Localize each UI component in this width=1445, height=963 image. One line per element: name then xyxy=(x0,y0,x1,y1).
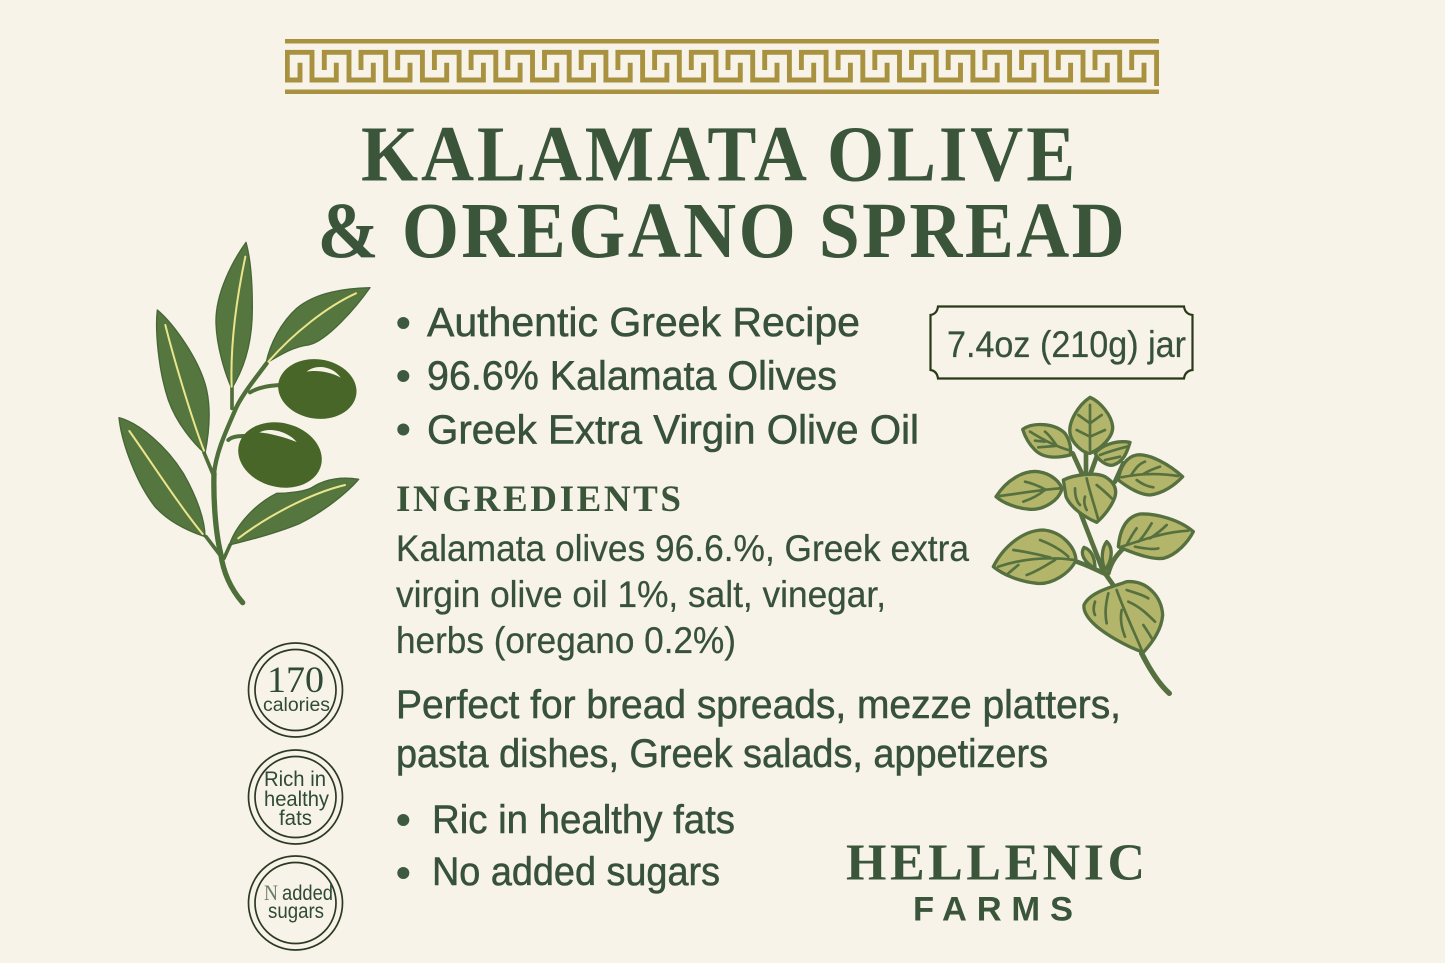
feature bullet list xyxy=(397,299,919,452)
badge: no added sugars: sugars xyxy=(268,900,324,923)
title: KALAMATA OLIVE xyxy=(361,110,1075,198)
ingredients heading: INGREDIENTS xyxy=(396,479,681,520)
icon: olive branch xyxy=(119,242,370,603)
feature bullet list: Authentic Greek Recipe xyxy=(427,299,860,345)
badge: no added sugars: added xyxy=(282,882,333,905)
feature bullet list: Greek Extra Virgin Olive Oil xyxy=(427,406,919,452)
health bullet list: Ric in healthy fats xyxy=(432,798,735,842)
badge: no added sugars xyxy=(248,856,342,950)
brand logo: FARMS xyxy=(913,891,1073,929)
badge: rich in healthy fats xyxy=(248,750,342,844)
jar size label: 7.4oz (210g) jar xyxy=(947,324,1186,365)
feature bullet list: 96.6% Kalamata Olives xyxy=(427,352,837,398)
ingredients text: virgin olive oil 1%, salt, vinegar, xyxy=(396,574,886,615)
ingredients text: herbs (oregano 0.2%) xyxy=(396,620,736,661)
olives xyxy=(231,354,360,496)
jar size label xyxy=(930,306,1192,378)
badge: rich in healthy fats: Rich in xyxy=(264,768,326,791)
ingredients text xyxy=(396,528,969,661)
badge: rich in healthy fats: fats xyxy=(279,807,312,830)
badge: 170 calories: 170 xyxy=(267,660,324,701)
health bullet list xyxy=(397,798,735,894)
badge: rich in healthy fats: healthy xyxy=(264,788,329,811)
brand logo: HELLENIC xyxy=(846,834,1145,892)
badge: 170 calories xyxy=(248,643,342,737)
title xyxy=(318,110,1125,275)
badge: no added sugars: N xyxy=(264,880,278,905)
usage text: Perfect for bread spreads, mezze platters, xyxy=(396,683,1121,727)
badge: 170 calories: calories xyxy=(263,695,330,716)
usage text: pasta dishes, Greek salads, appetizers xyxy=(396,732,1048,776)
health bullet list: No added sugars xyxy=(432,850,720,894)
icon: oregano sprig xyxy=(993,397,1193,693)
usage text xyxy=(396,683,1121,776)
greek key border xyxy=(285,39,1159,94)
brand logo xyxy=(846,834,1145,929)
title: & OREGANO SPREAD xyxy=(318,187,1125,275)
ingredients text: Kalamata olives 96.6.%, Greek extra xyxy=(396,528,969,569)
